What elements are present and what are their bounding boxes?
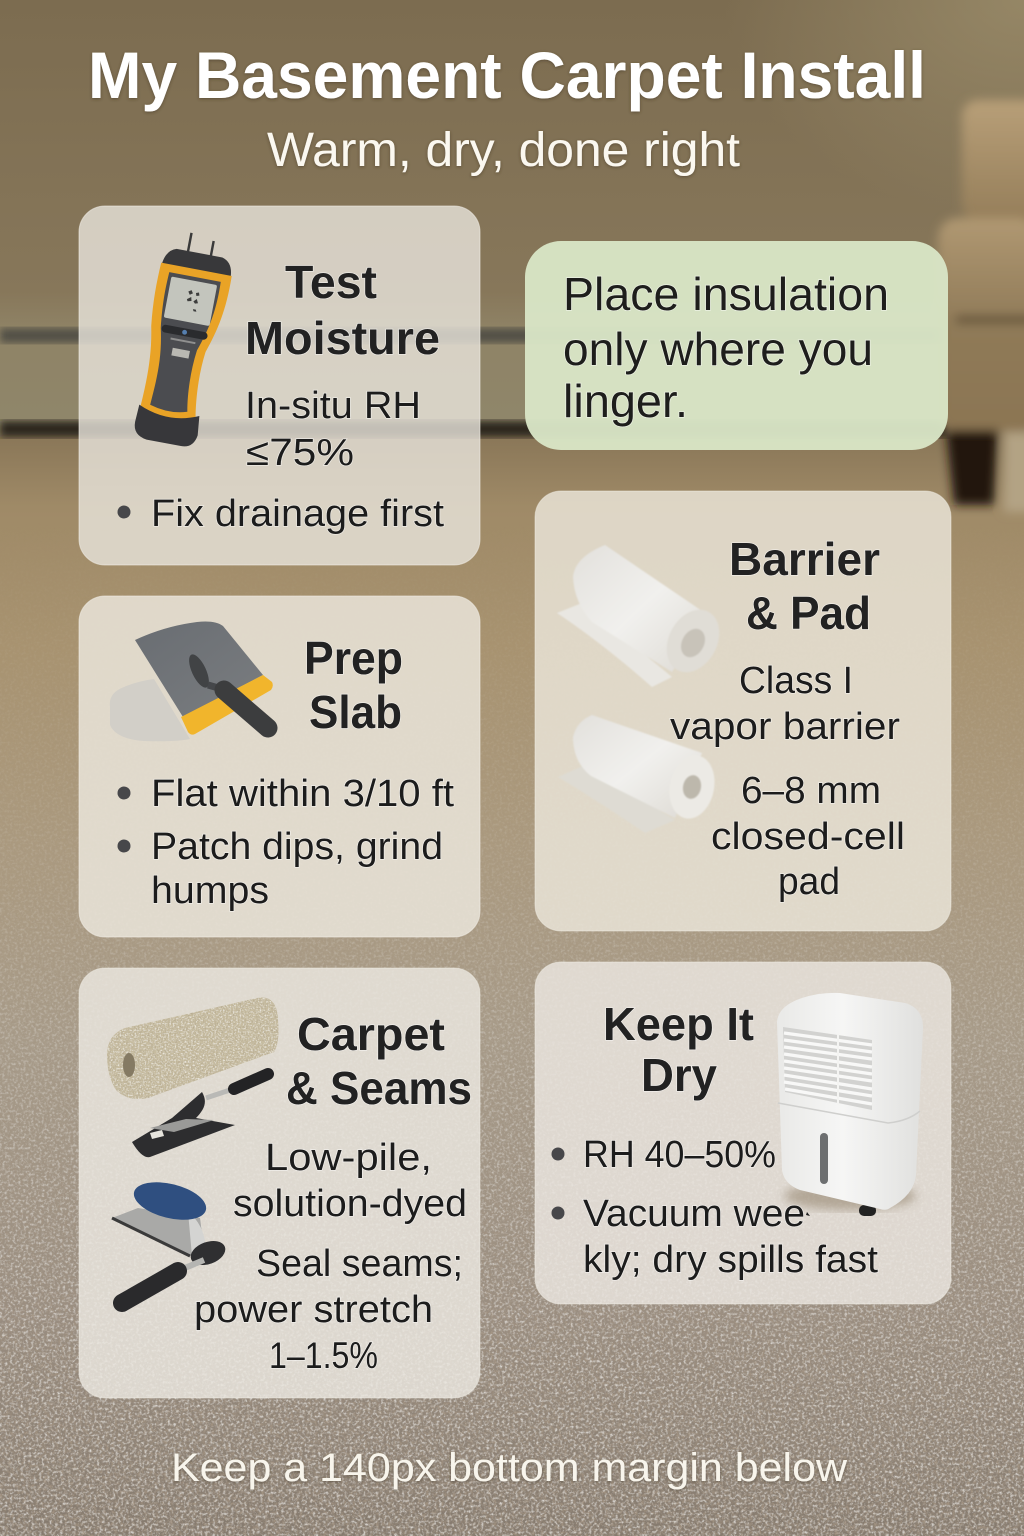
bullet: vacuum and spills — [552, 1193, 878, 1281]
icon: moisture meter — [128, 228, 238, 450]
text: vapor barrier — [670, 660, 900, 748]
text: seams and stretch: 1–1.5% — [269, 1335, 378, 1376]
footer note: Keep a 140px bottom margin below — [171, 1446, 847, 1490]
text: RH limit: ≤75% — [246, 432, 354, 474]
callout: insulation tip: only where you — [563, 323, 873, 375]
bullet: patch and grind: Patch dips, grind — [151, 826, 443, 868]
text: vapor barrier: vapor barrier — [670, 706, 900, 748]
bullet: patch and grind — [118, 826, 443, 912]
subtitle: Warm, dry, done right — [267, 124, 740, 177]
bullet: fix drainage: Fix drainage first — [151, 493, 444, 535]
heading — [245, 256, 440, 364]
icon: seam iron — [132, 1074, 268, 1157]
bullet: patch and grind: humps — [151, 870, 269, 912]
text: carpet type: solution-dyed — [233, 1183, 467, 1225]
text: seams and stretch: power stretch — [194, 1289, 433, 1331]
text: RH limit: In-situ RH — [245, 385, 421, 427]
text: carpet type: Low-pile, — [265, 1137, 432, 1179]
heading: & Pad — [746, 587, 871, 639]
heading — [286, 1008, 472, 1114]
heading: Slab — [309, 686, 402, 738]
heading: Moisture — [245, 312, 440, 364]
panel: keep it dry — [535, 962, 951, 1304]
heading: Carpet — [297, 1008, 445, 1060]
panel: prep slab — [79, 596, 480, 937]
icon: trowel on patch — [110, 622, 273, 741]
text: pad spec: closed-cell — [711, 816, 905, 858]
heading — [729, 533, 880, 639]
text: pad spec: 6–8 mm — [741, 770, 881, 812]
icon: power stretcher tool — [112, 1176, 229, 1303]
heading — [304, 632, 403, 738]
text: pad spec: pad — [778, 861, 840, 903]
heading — [603, 998, 754, 1101]
callout: insulation tip — [525, 241, 948, 450]
icon: vapor barrier roll — [557, 545, 730, 687]
text: RH limit — [245, 385, 421, 474]
heading: Dry — [641, 1049, 717, 1101]
icon: carpet roll — [107, 997, 278, 1099]
text: seams and stretch: Seal seams; — [256, 1243, 463, 1285]
bullet: flatness: Flat within 3/10 ft — [151, 773, 454, 815]
text: carpet type — [233, 1137, 467, 1225]
title: My Basement Carpet Install — [88, 38, 926, 112]
heading: Barrier — [729, 533, 880, 585]
heading: Prep — [304, 632, 403, 684]
icon: dehumidifier — [777, 993, 923, 1216]
panel: carpet and seams — [79, 968, 480, 1398]
panel: barrier and pad — [535, 491, 951, 931]
bullet: vacuum and spills: Vacuum wee — [583, 1193, 805, 1235]
heading: Keep It — [603, 998, 754, 1050]
heading: & Seams — [286, 1062, 472, 1114]
callout: insulation tip: linger. — [563, 375, 688, 427]
bullet: RH target: RH 40–50% — [583, 1134, 776, 1176]
icon: pad roll — [558, 715, 720, 833]
bullet: vacuum and spills: kly; dry spills fast — [583, 1239, 878, 1281]
heading: Test — [285, 256, 377, 308]
callout: insulation tip: Place insulation — [563, 268, 889, 320]
text: seams and stretch — [194, 1243, 463, 1376]
text: pad spec — [711, 770, 905, 903]
text: vapor barrier: Class I — [739, 660, 853, 702]
panel: test moisture — [79, 206, 480, 565]
